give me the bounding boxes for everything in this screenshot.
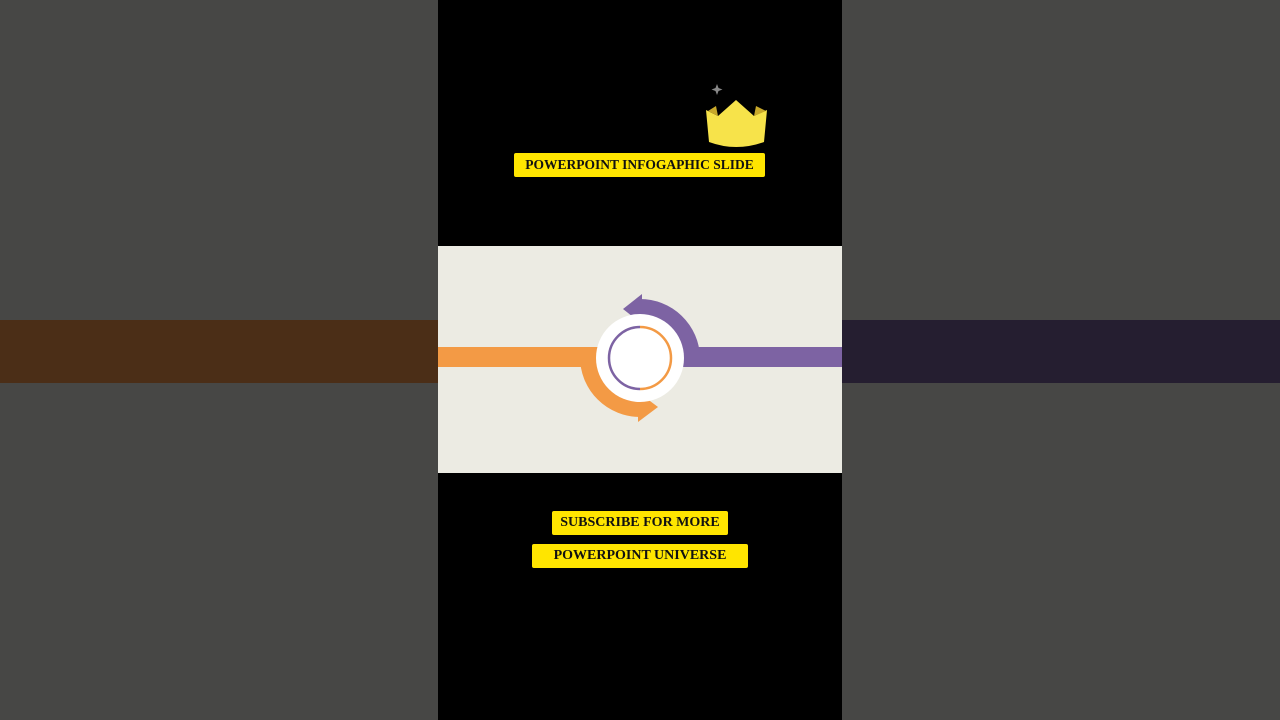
- center circle: [596, 314, 684, 402]
- slide panel: [438, 246, 842, 473]
- subscribe label: SUBSCRIBE FOR MORE: [560, 515, 720, 530]
- right side band: [842, 320, 1280, 383]
- purple band and arrow: [623, 294, 842, 357]
- center black column: [438, 0, 842, 720]
- diagram: cycle arrows: [438, 294, 842, 422]
- channel label: [532, 544, 748, 568]
- left side band: [0, 320, 438, 383]
- icon: crown: [706, 84, 767, 147]
- orange band and arrow: [438, 357, 658, 422]
- subscribe label: [552, 511, 728, 535]
- title: POWERPOINT INFOGAPHIC SLIDE: [525, 157, 754, 172]
- title: [514, 153, 765, 177]
- channel label: POWERPOINT UNIVERSE: [554, 548, 726, 563]
